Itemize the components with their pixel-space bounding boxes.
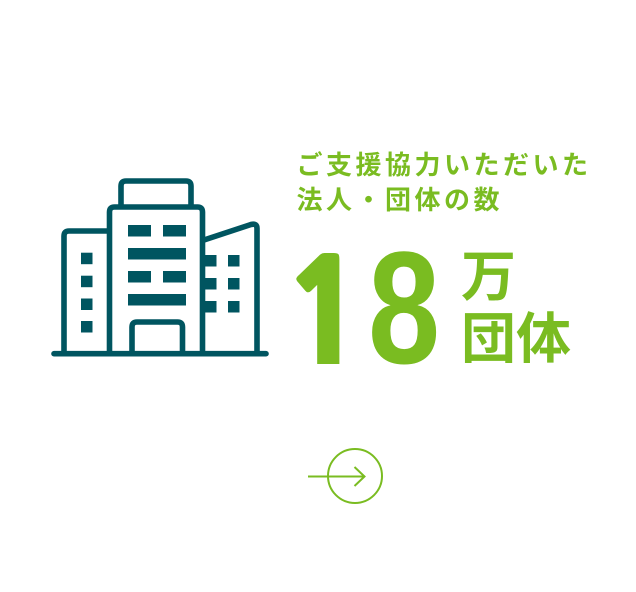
unit: dantai: 団体 — [461, 308, 571, 370]
heading: label line 2: 法人・団体の数 — [296, 185, 503, 215]
big number: 1 — [283, 243, 368, 387]
big number: 8 — [368, 218, 440, 397]
heading: label line 1: ご支援協力いただいた — [296, 150, 592, 180]
unit: man: 万 — [461, 246, 516, 308]
big number — [296, 251, 436, 364]
